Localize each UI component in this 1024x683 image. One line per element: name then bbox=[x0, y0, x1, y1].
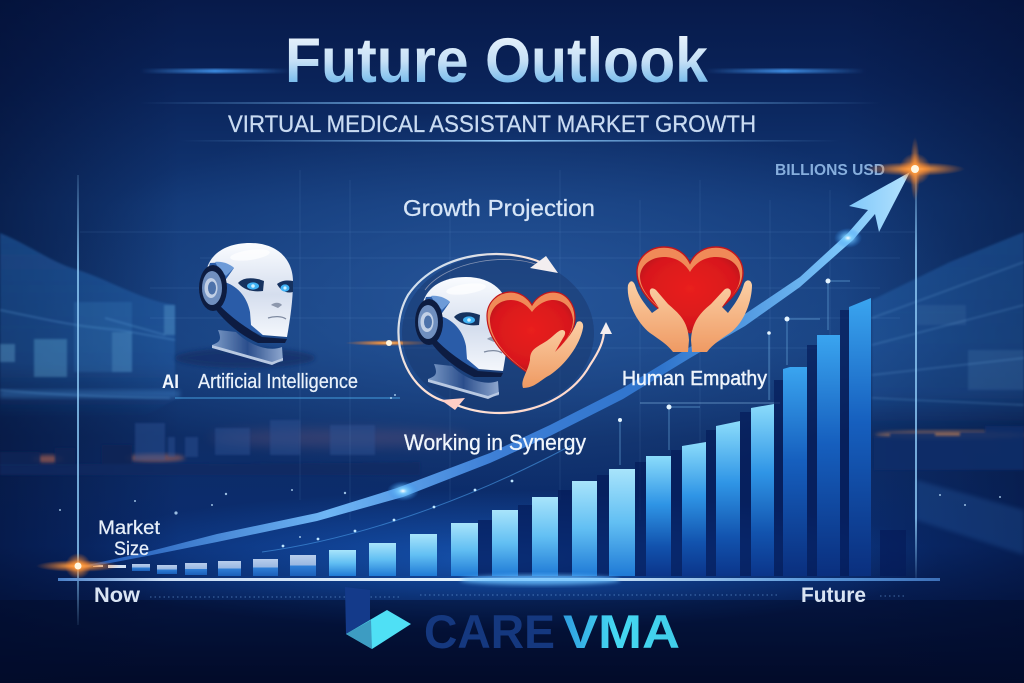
background grid bbox=[80, 170, 915, 520]
subtitle: VIRTUAL MEDICAL ASSISTANT MARKET GROWTH bbox=[228, 111, 756, 138]
subtitle rule bbox=[180, 140, 840, 142]
glow: arrow tip bbox=[865, 137, 965, 201]
logo wordmark: CARE bbox=[424, 605, 555, 658]
label: working in synergy: Working in Synergy bbox=[404, 430, 586, 455]
bar shadows bbox=[478, 310, 906, 576]
synergy icon bbox=[398, 254, 612, 413]
synergy ring bbox=[398, 254, 604, 413]
tall bars bbox=[572, 481, 597, 576]
ring interior shade bbox=[402, 255, 594, 411]
label: artificial intelligence: Artificial Intelligence bbox=[198, 371, 358, 393]
label: future: Future bbox=[801, 584, 866, 607]
label: human empathy: Human Empathy bbox=[622, 368, 767, 390]
synergy robot head bbox=[415, 277, 509, 399]
label: market size: Market bbox=[98, 518, 161, 539]
logo: care vma: VMA bbox=[563, 605, 680, 658]
synergy hand bbox=[522, 321, 583, 388]
heading: growth projection: Growth Projection bbox=[403, 195, 595, 221]
small bars bbox=[93, 565, 103, 567]
right hand bbox=[691, 280, 752, 352]
glow: central flare bbox=[345, 340, 433, 346]
dotted scale line bbox=[150, 595, 905, 597]
star particles bbox=[59, 394, 1001, 538]
title rule bbox=[140, 102, 880, 104]
right building panels bbox=[872, 232, 1024, 555]
glow: curve start bbox=[36, 553, 120, 579]
title: Future Outlook bbox=[285, 26, 709, 96]
growth curve arrow bbox=[78, 172, 910, 569]
left building panels bbox=[0, 233, 180, 418]
heart bbox=[637, 247, 743, 333]
node dots above bars bbox=[262, 278, 850, 552]
synergy heart bbox=[487, 292, 575, 373]
horizontal axis bbox=[58, 575, 940, 585]
ring arrowheads bbox=[441, 256, 612, 410]
left hand bbox=[628, 281, 689, 352]
label: now: Now bbox=[94, 584, 141, 607]
title bbox=[140, 26, 865, 96]
label: market size bbox=[98, 518, 161, 560]
icon: heart held in hands bbox=[628, 247, 752, 352]
logo mark bbox=[345, 587, 411, 649]
bar chart bbox=[93, 298, 906, 576]
logo: care vma bbox=[345, 587, 680, 658]
label: AI: AI bbox=[162, 372, 179, 393]
city skyline bbox=[0, 420, 1024, 475]
medium bars bbox=[329, 550, 356, 576]
vertical axis lines bbox=[77, 170, 917, 625]
axis label: billions usd: BILLIONS USD bbox=[775, 162, 885, 179]
icon: AI robot head bbox=[175, 243, 315, 368]
label: market size: Size bbox=[114, 539, 149, 560]
